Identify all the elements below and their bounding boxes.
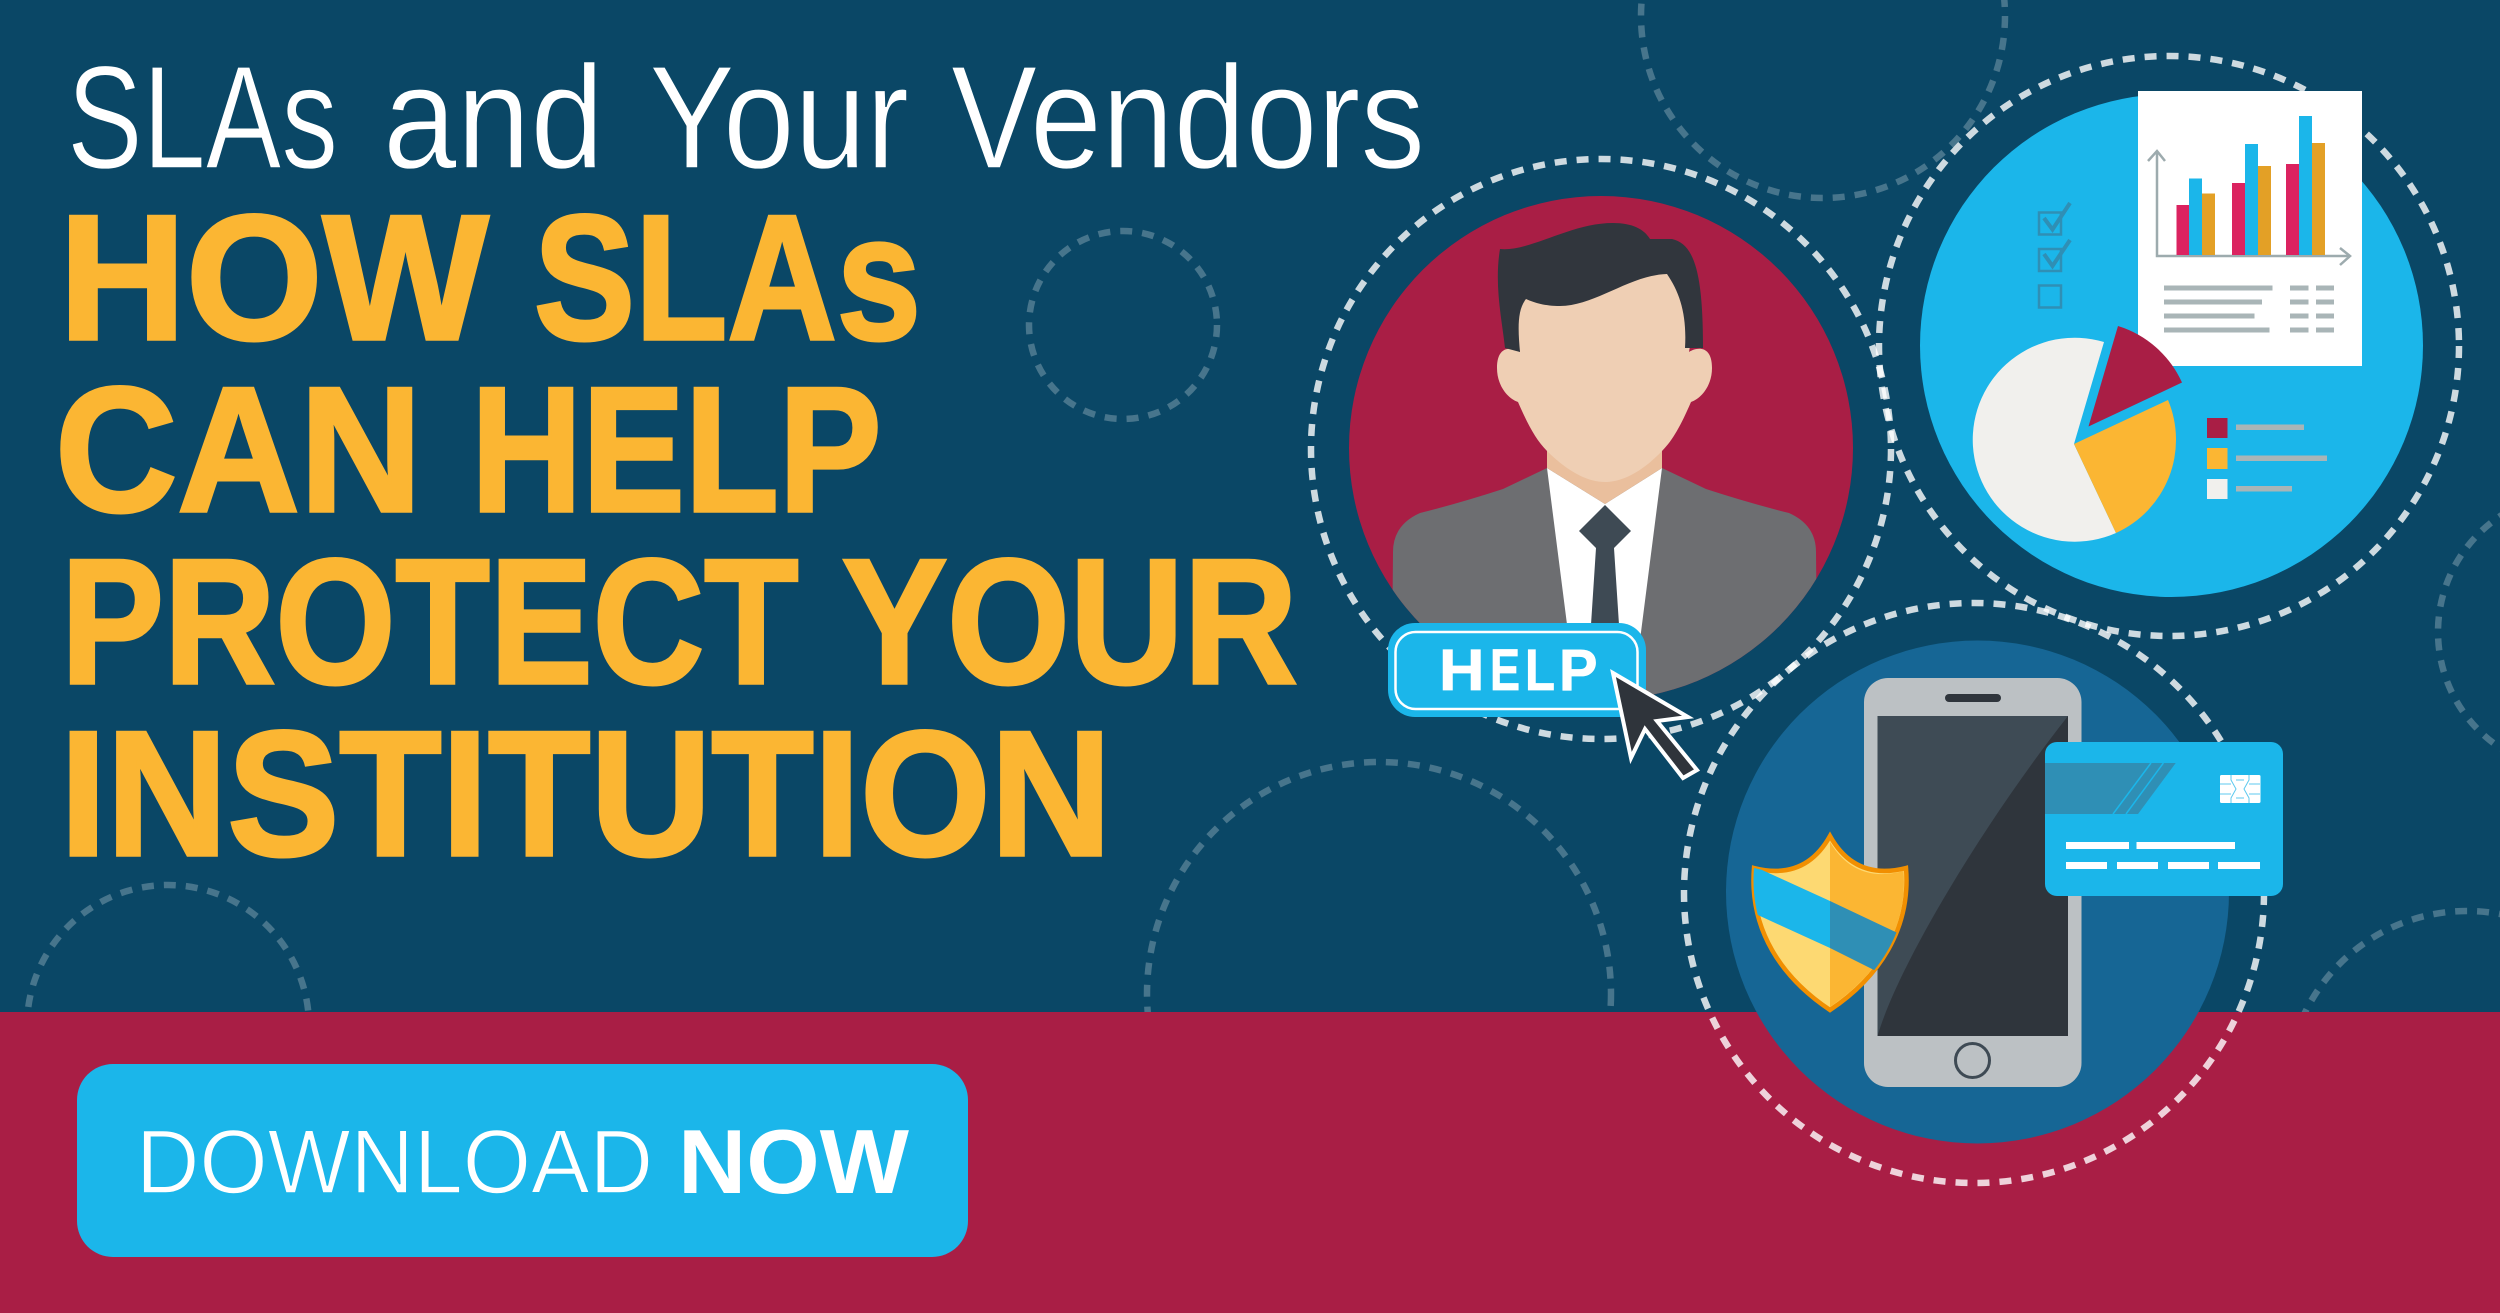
title: and bbox=[383, 36, 604, 200]
title: Vendors bbox=[951, 36, 1425, 200]
checklist bbox=[2039, 203, 2070, 308]
title: SLAs bbox=[67, 36, 338, 200]
headline: YOUR bbox=[842, 522, 1298, 721]
shield bbox=[1749, 836, 1907, 1010]
person bbox=[1391, 223, 1818, 760]
pie chart bbox=[1973, 326, 2182, 542]
title: Your bbox=[649, 36, 909, 200]
circle: charts and report bbox=[1879, 56, 2459, 636]
download button: NOW bbox=[678, 1112, 909, 1213]
headline bbox=[55, 178, 1298, 893]
report page bbox=[2138, 91, 2362, 366]
download button bbox=[77, 1064, 968, 1257]
pie legend bbox=[2207, 418, 2327, 499]
download button: DOWNLOAD bbox=[136, 1112, 653, 1213]
help button: P bbox=[1559, 638, 1598, 703]
footer band bbox=[0, 1012, 2500, 1313]
chip bbox=[2220, 775, 2260, 803]
cursor arrow bbox=[1613, 673, 1697, 778]
headline: PROTECT bbox=[61, 522, 798, 721]
circle: phone, shield and card bbox=[1684, 603, 2283, 1183]
smartphone bbox=[1864, 678, 2082, 1087]
help button bbox=[1388, 623, 1646, 717]
headline: INSTITUTION bbox=[60, 694, 1112, 893]
help button: L bbox=[1525, 638, 1555, 703]
headline: CAN bbox=[55, 350, 422, 549]
credit card bbox=[2045, 742, 2283, 896]
headline: SLAs bbox=[534, 178, 921, 377]
report text lines bbox=[2164, 286, 2334, 332]
circle: person with help button bbox=[1311, 159, 1891, 778]
headline: HOW bbox=[59, 178, 488, 377]
title bbox=[67, 36, 1425, 200]
bar chart bbox=[2148, 116, 2350, 265]
help button: H bbox=[1439, 638, 1484, 703]
headline: HELP bbox=[471, 350, 882, 549]
help button: E bbox=[1490, 638, 1520, 703]
